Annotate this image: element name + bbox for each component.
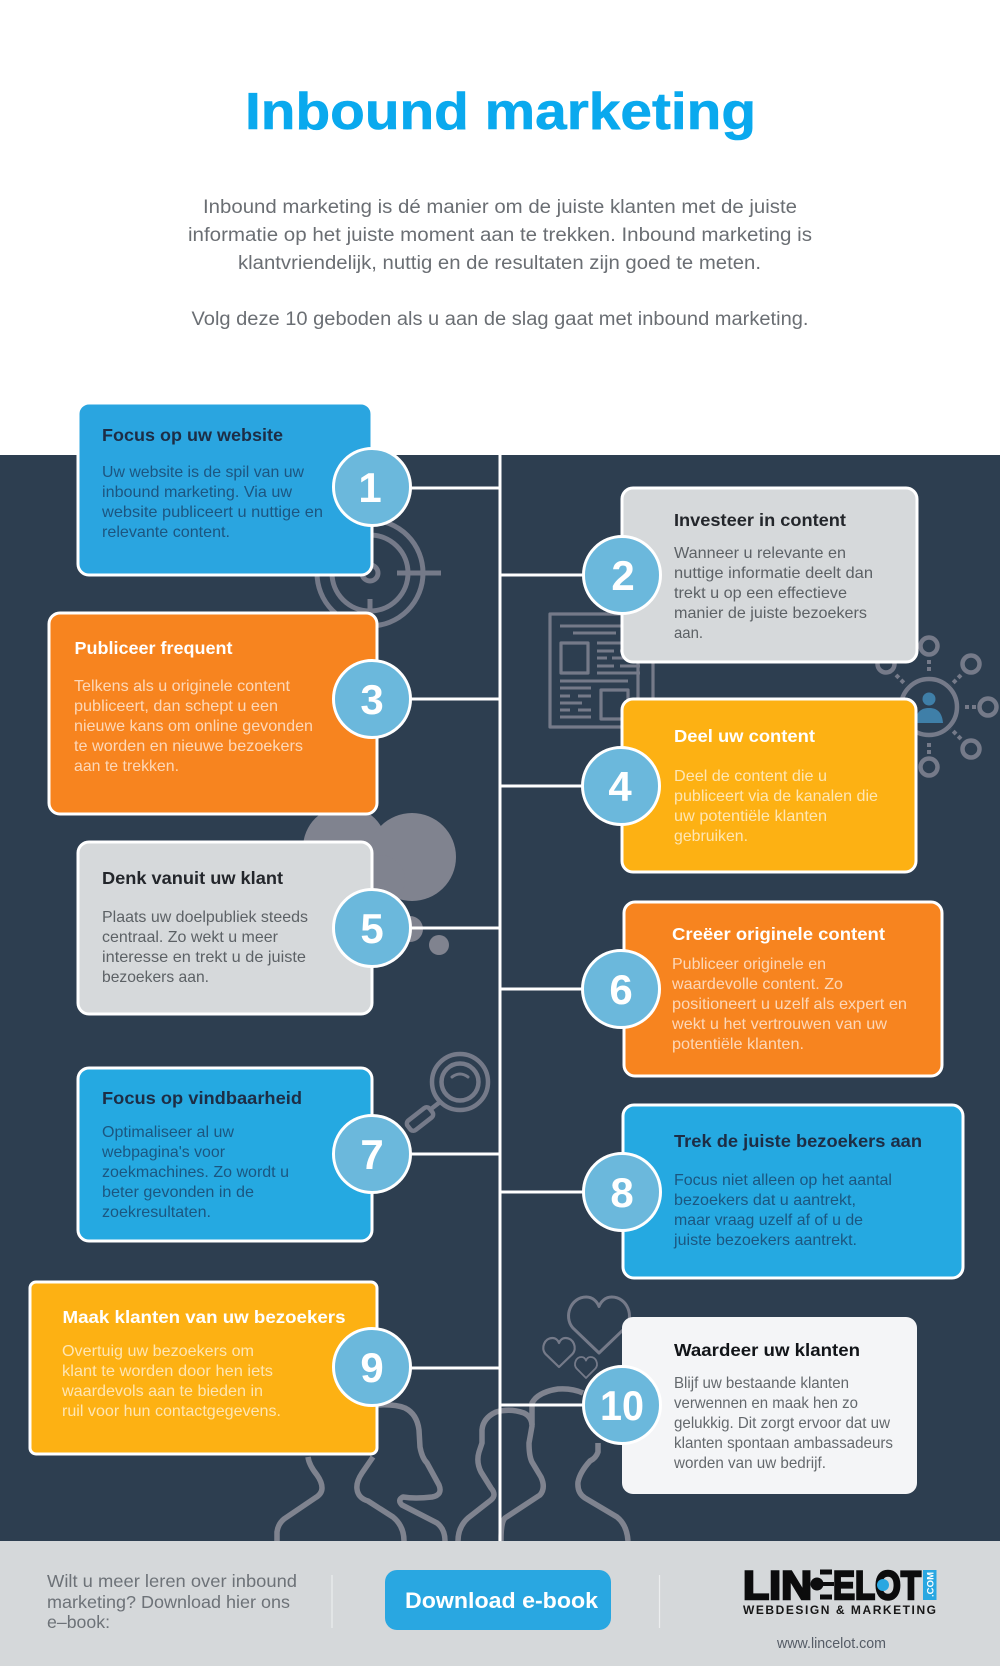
step 2 body: manier de juiste bezoekers — [674, 605, 867, 622]
step 3 body: nieuwe kans om online gevonden — [74, 718, 313, 735]
panel: step 6 creeer originele content — [582, 902, 942, 1076]
step 6 body: potentiële klanten. — [672, 1036, 804, 1053]
panel: step 8 trek de juiste bezoekers aan — [584, 1105, 963, 1278]
badge 9 — [334, 1328, 410, 1406]
step 7 heading: Focus op vindbaarheid — [102, 1088, 302, 1108]
icon: document — [550, 614, 653, 729]
panel: step 7 focus op vindbaarheid — [78, 1068, 410, 1241]
badge 8 — [584, 1154, 660, 1230]
step 5 body: Plaats uw doelpubliek steeds — [102, 909, 308, 926]
panel: step 2 investeer in content — [584, 488, 917, 662]
step 7 body: beter gevonden in de — [102, 1184, 254, 1201]
step 9 body: klant te worden door hen iets — [62, 1363, 273, 1380]
step 8 body: bezoekers dat u aantrekt, — [674, 1192, 856, 1209]
step 8 body — [673, 1172, 892, 1249]
step 10 body: verwennen en maak hen zo — [674, 1395, 858, 1412]
step 2 body: nuttige informatie deelt dan — [674, 565, 873, 582]
step 8 heading: Trek de juiste bezoekers aan — [674, 1131, 922, 1151]
step 6 body — [671, 956, 907, 1053]
step 3 body: Telkens als u originele content — [74, 678, 291, 695]
icon: people silhouettes — [277, 1389, 628, 1541]
timeline spine with connectors — [372, 455, 622, 1541]
step 1 body: website publiceert u nuttige en — [101, 504, 323, 521]
step 1 body: inbound marketing. Via uw — [102, 484, 292, 501]
step 3 body: te worden en nieuwe bezoekers — [74, 738, 303, 755]
logo: .COM — [926, 1572, 936, 1597]
step 3 body — [74, 678, 313, 775]
intro text: informatie op het juiste moment aan te trekken. Inbound marketing is — [188, 225, 812, 246]
step 5 body: centraal. Zo wekt u meer — [102, 929, 279, 946]
badge 3 — [334, 660, 410, 738]
icon: network of people — [878, 638, 996, 776]
title: Inbound marketing — [245, 83, 756, 141]
intro text: Inbound marketing is dé manier om de juiste klanten met de juiste — [203, 197, 797, 218]
panel: step 1 focus op uw website — [78, 403, 410, 575]
logo — [743, 1564, 936, 1617]
step 3 body: aan te trekken. — [74, 758, 179, 775]
badge 6: 6 — [609, 966, 633, 1013]
badge 2: 2 — [611, 552, 635, 599]
logo: WEBDESIGN & MARKETING — [743, 1603, 936, 1617]
step 4 heading: Deel uw content — [674, 726, 815, 746]
step 7 body — [101, 1124, 289, 1221]
step 5 body — [102, 909, 308, 986]
step 4 body: gebruiken. — [674, 828, 748, 845]
badge 3: 3 — [360, 676, 384, 723]
footer text: marketing? Download hier ons — [47, 1592, 290, 1612]
step 1 heading: Focus op uw website — [102, 425, 283, 445]
footer text — [47, 1571, 297, 1632]
badge 1: 1 — [358, 464, 382, 511]
step 10 body: worden van uw bedrijf. — [673, 1455, 826, 1472]
step 6 body: waardevolle content. Zo — [671, 976, 843, 993]
step 9 body: waardevols aan te bieden in — [61, 1383, 263, 1400]
badge 5: 5 — [360, 905, 384, 952]
step 3 heading: Publiceer frequent — [74, 638, 233, 658]
badge 6 — [582, 950, 660, 1028]
footer text: e–book: — [47, 1612, 110, 1632]
step 10 heading: Waardeer uw klanten — [674, 1340, 860, 1360]
step 6 body: positioneert u uzelf als expert en — [672, 996, 907, 1013]
step 7 body: zoekresultaten. — [102, 1204, 211, 1221]
step 5 heading: Denk vanuit uw klant — [102, 868, 283, 888]
step 4 body — [674, 768, 878, 845]
badge 10: 10 — [600, 1382, 644, 1429]
step 4 body: publiceert via de kanalen die — [674, 788, 878, 805]
footer band — [0, 1541, 1000, 1666]
step 2 body — [674, 545, 873, 642]
step 7 body: webpagina's voor — [101, 1144, 226, 1161]
panel: step 4 deel uw content — [582, 699, 916, 872]
badge 10 — [584, 1366, 660, 1444]
step 2 body: trekt u op een effectieve — [674, 585, 847, 602]
logo: ELOT — [833, 1564, 921, 1608]
step 10 body: klanten spontaan ambassadeurs — [674, 1435, 893, 1452]
step 2 body: Wanneer u relevante en — [674, 545, 846, 562]
step 9 heading: Maak klanten van uw bezoekers — [62, 1307, 346, 1327]
step 7 body: zoekmachines. Zo wordt u — [102, 1164, 289, 1181]
step 3 body: publiceert, dan schept u een — [74, 698, 278, 715]
badge 9: 9 — [360, 1344, 384, 1391]
step 6 body: Publiceer originele en — [672, 956, 826, 973]
badge 7 — [334, 1116, 410, 1192]
download button — [385, 1570, 611, 1630]
step 9 body — [61, 1343, 281, 1420]
step 10 body: Blijf uw bestaande klanten — [674, 1375, 849, 1392]
step 5 body: interesse en trekt u de juiste — [102, 949, 306, 966]
step 5 body: bezoekers aan. — [102, 969, 209, 986]
badge 4 — [582, 748, 660, 824]
step 4 body: Deel de content die u — [674, 768, 827, 785]
badge 7: 7 — [360, 1131, 384, 1178]
footer text: Wilt u meer leren over inbound — [47, 1571, 297, 1591]
step 4 body: uw potentiële klanten — [674, 808, 827, 825]
step 2 body: aan. — [674, 625, 703, 642]
step 8 body: maar vraag uzelf af of u de — [674, 1212, 863, 1229]
step 8 body: juiste bezoekers aantrekt. — [673, 1232, 857, 1249]
panel: step 10 waardeer uw klanten — [584, 1317, 917, 1494]
intro text: klantvriendelijk, nuttig en de resultaten zijn goed te meten. — [238, 253, 761, 274]
panel: step 9 maak klanten van uw bezoekers — [30, 1282, 410, 1454]
step 2 heading: Investeer in content — [674, 510, 846, 530]
website url: www.lincelot.com — [776, 1636, 886, 1652]
dark background band — [0, 455, 1000, 1541]
icon: hearts — [543, 1297, 629, 1378]
panel: step 5 denk vanuit uw klant — [78, 842, 410, 1014]
badge 4: 4 — [608, 763, 632, 810]
icon: target — [317, 520, 441, 626]
step 8 body: Focus niet alleen op het aantal — [674, 1172, 892, 1189]
step 6 heading: Creëer originele content — [672, 924, 885, 944]
intro text — [188, 197, 812, 330]
badge 8: 8 — [610, 1169, 634, 1216]
step 6 body: wekt u het vertrouwen van uw — [671, 1016, 887, 1033]
step 10 body — [673, 1375, 893, 1472]
intro text: Volg deze 10 geboden als u aan de slag gaat met inbound marketing. — [192, 309, 808, 330]
badge 2 — [584, 536, 660, 614]
step 10 body: gelukkig. Dit zorgt ervoor dat uw — [674, 1415, 890, 1432]
badge 5 — [334, 890, 410, 966]
step 9 body: ruil voor hun contactgegevens. — [62, 1403, 281, 1420]
icon: magnifying glass — [405, 1054, 488, 1132]
icon: speech bubbles — [303, 806, 456, 955]
panel: step 3 publiceer frequent — [49, 613, 410, 814]
badge 1 — [334, 448, 410, 526]
step 1 body — [101, 464, 323, 541]
step 9 body: Overtuig uw bezoekers om — [62, 1343, 254, 1360]
step 7 body: Optimaliseer al uw — [102, 1124, 234, 1141]
logo: LIN — [743, 1564, 812, 1608]
download button: Download e-book — [405, 1588, 599, 1613]
step 1 body: relevante content. — [102, 524, 230, 541]
step 1 body: Uw website is de spil van uw — [102, 464, 304, 481]
